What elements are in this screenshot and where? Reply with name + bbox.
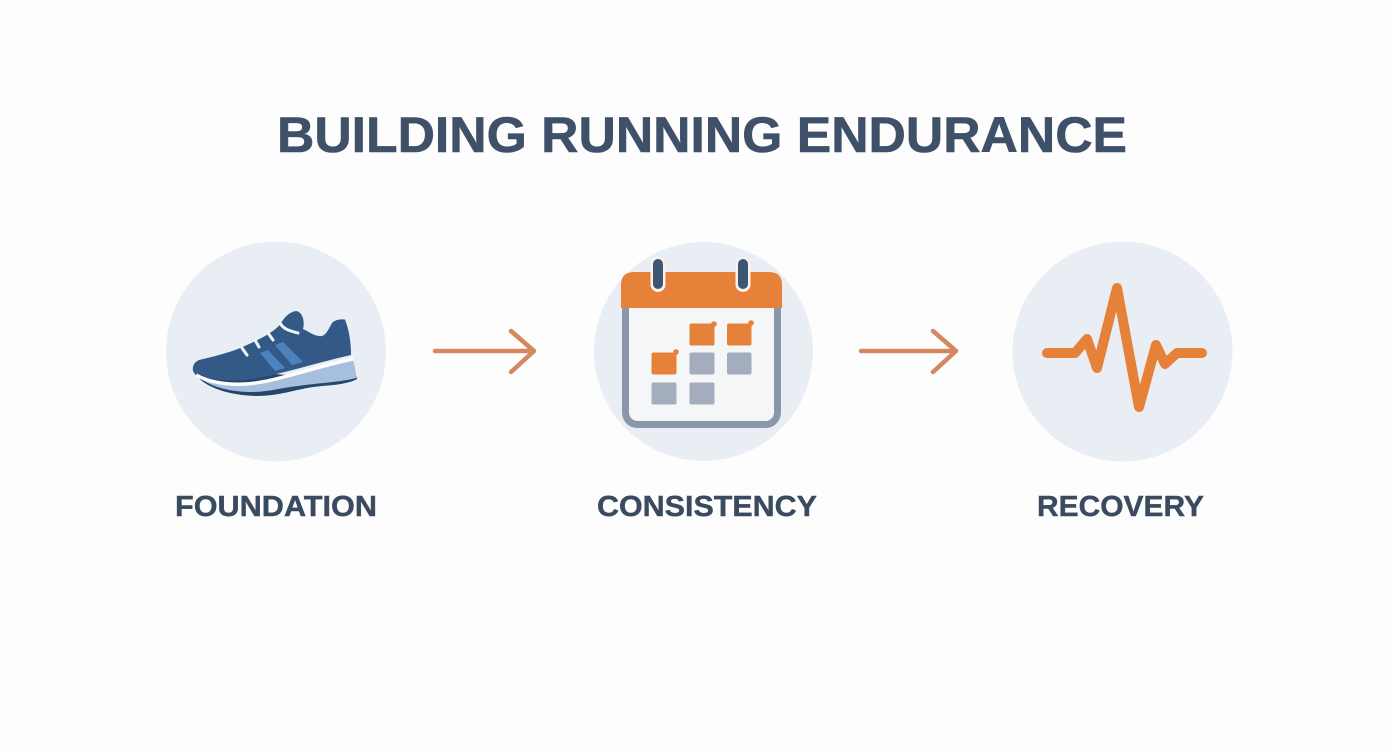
icon circle: recovery xyxy=(1012,242,1232,462)
panel: recovery xyxy=(1012,242,1232,523)
shoe upper xyxy=(193,311,351,380)
label: foundation: FOUNDATION xyxy=(175,491,377,523)
shoe outsole xyxy=(193,368,357,396)
icon: calendar xyxy=(621,257,782,424)
label: recovery: RECOVERY xyxy=(1037,491,1204,523)
arrow: foundation to consistency xyxy=(435,331,534,372)
remaining days xyxy=(652,352,752,404)
shoe stripes xyxy=(260,342,303,371)
icon: heartbeat line xyxy=(1047,288,1202,407)
panel: consistency xyxy=(594,242,817,523)
shoe laces xyxy=(242,323,298,355)
shoe sole highlight xyxy=(196,359,353,384)
icon circle: foundation xyxy=(166,242,386,462)
icon: running shoe xyxy=(193,311,357,396)
panel: foundation xyxy=(166,242,386,523)
arrow: consistency to recovery xyxy=(861,331,956,372)
shoe midsole xyxy=(196,360,356,392)
icon circle: consistency xyxy=(594,242,813,461)
title: BUILDING RUNNING ENDURANCE xyxy=(277,107,1127,163)
label: consistency: CONSISTENCY xyxy=(597,491,817,523)
completed days xyxy=(652,320,754,374)
